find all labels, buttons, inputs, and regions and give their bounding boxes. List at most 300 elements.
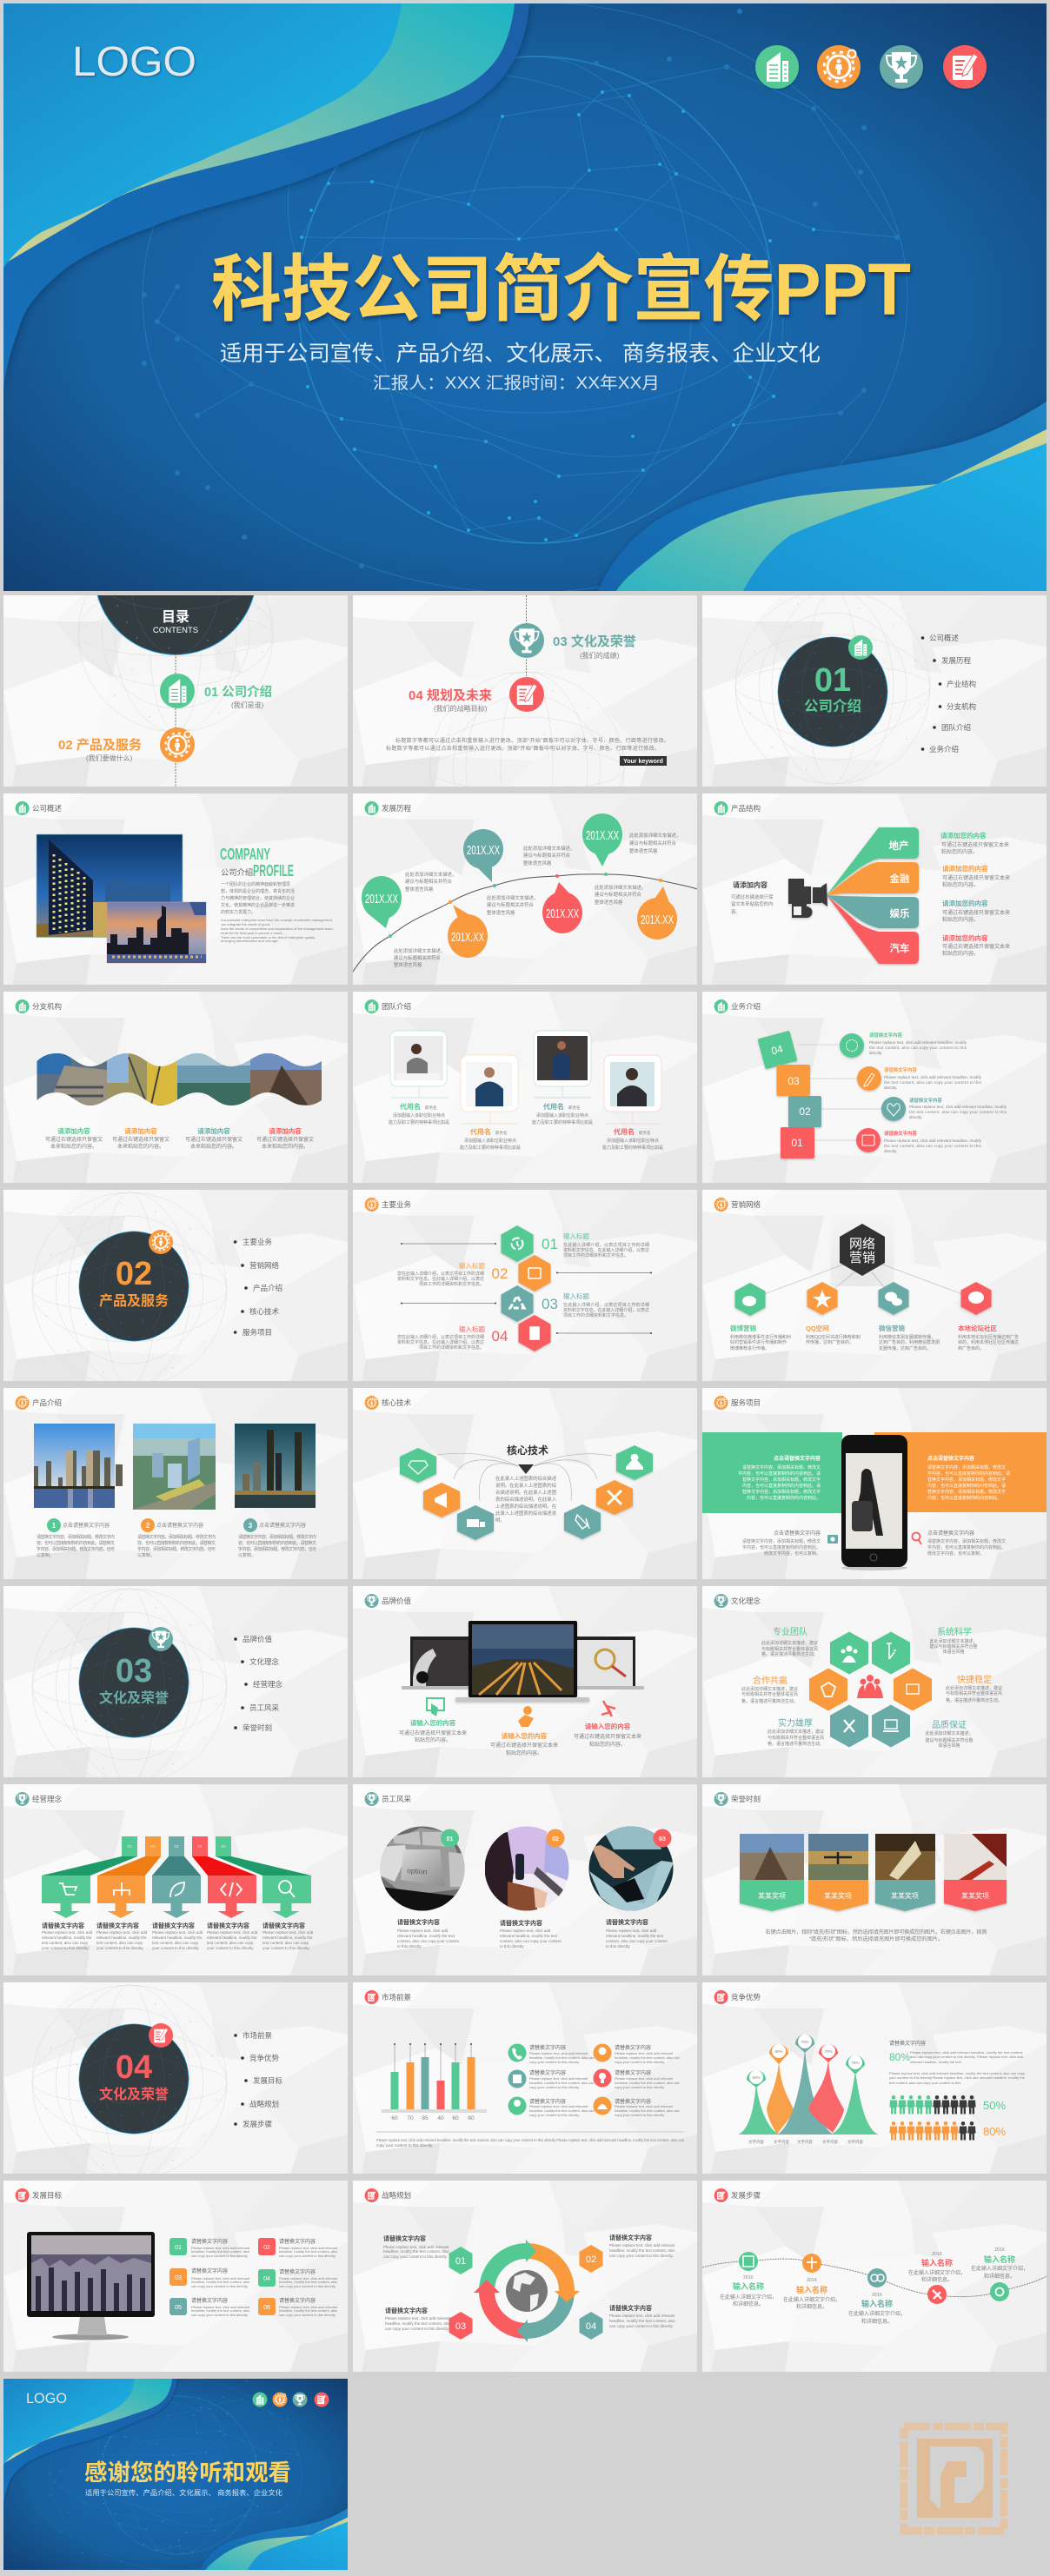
legend text: headline, modify the text content, also can [529,2055,595,2060]
text blocks: can copy your content to this directly. [385,2327,449,2331]
chinese paragraph: 一个团队的企业的精神面貌和管理思 [221,881,290,887]
text blocks: 请替换文字内容 [609,2304,652,2312]
goal text: can copy your content to this directly. [279,2254,336,2258]
header [16,1396,62,1410]
captions: content, also can copy your content [397,1939,460,1943]
step curve [702,2259,1047,2297]
timeline curve [353,874,697,972]
balloon 4 [448,905,488,958]
panel: product intro [3,1388,348,1579]
header [714,801,761,815]
text blocks: 资料和文字信息。在此输入详细介绍，以表达 [397,1339,484,1345]
section badge: 02 [116,1256,152,1292]
label text: 此处添加详细文本描述，建议 [768,1729,824,1735]
text blocks: can copy your content to this directly. [609,2254,674,2258]
header [16,999,62,1013]
watermark stamp [904,2427,1004,2531]
branch texts: 请添加内容 [57,1126,90,1135]
panel: marketing network [702,1190,1047,1381]
captions: relevant headline, modify the text [397,1934,455,1938]
label text: 格，语言描述尽量简洁生动。 [768,1741,824,1747]
header: 经营理念 [32,1795,63,1803]
captions: 2 [146,1522,150,1530]
band text left: 替换文字内容，添加相关标题，修改文字 [742,1477,821,1483]
bar chart: 80 [468,2115,475,2121]
company text [220,846,294,880]
text blocks: Please replace text, click add relevant [609,2243,675,2247]
column text: relevant headline, modify the [207,1935,257,1940]
heading: 核心技术 [507,1444,548,1457]
number tiles: 05 [175,2305,182,2311]
step 1 text: 输入名称 [733,2281,764,2291]
channel text: 利用QQ空间书进行推荐和制 [806,1334,861,1340]
badge 3 [654,1829,671,1848]
circular photo 2 [485,1826,570,1911]
agenda list: 产业结构 [947,680,976,688]
goal text: headline, modify the text content, also [191,2280,250,2284]
header: 荣誉时刻 [731,1795,761,1803]
panel: staff [353,1784,697,1975]
member 2 [460,1055,521,1151]
captions: content, also can copy your content [500,1939,562,1943]
caption 2: 粘贴您的内容。 [506,1749,542,1756]
ribbon labels: 某某奖项 [891,1891,919,1900]
header [365,1990,411,2004]
channel hexagons [735,1282,991,1316]
text blocks: 输入标题 [459,1325,485,1333]
lower right note: 点击请替换文字内容 [927,1530,974,1537]
block icons [59,1881,295,1897]
step 1 text: 在此输入详细文字介绍， [720,2294,777,2300]
legend text: Please replace text, click add relevant [529,2051,588,2055]
labels: 专业团队 [773,1626,807,1637]
section badge [79,2023,189,2134]
top tabs: 01 [127,1844,132,1849]
caption 1: 粘贴您的内容。 [415,1736,451,1743]
step 4 text: 在此输入详细文字介绍， [908,2269,966,2276]
header [16,801,63,815]
header [714,1396,761,1410]
number tiles: 06 [263,2305,270,2311]
company text: 公司介绍 [221,867,253,877]
branch texts: 可通过右键选择只保留文 [112,1136,169,1143]
member 3 [532,1031,593,1125]
step 1 text [720,2275,777,2307]
goal text: headline, modify the text content, also [279,2249,338,2254]
text blocks: 在此输入详细介绍，以表达项目工作的详细 [563,1242,649,1248]
fan labels [888,840,910,954]
band text right: 点击请替换文字内容 [927,1455,974,1462]
text blocks: can copy your content to this directly. [383,2254,448,2259]
legend text [529,2044,680,2117]
branch texts: 本来粘贴您的内容。 [190,1143,237,1150]
step 3 text: 输入名称 [861,2299,893,2308]
ribbon labels: 某某奖项 [961,1891,989,1900]
right description: text content, also can copy your content to this [889,2081,960,2085]
globe icon [506,2270,548,2312]
fan labels: 娱乐 [890,907,910,920]
description text: 标题数字等都可以通过点击和重新输入进行更改。顶部“开始”面板中可以对字体、字号、颜色、行距等进行修改。 [386,745,660,752]
description: 此录入上述图表的综合描述说 [495,1510,557,1517]
legend text: 请替换文字内容 [615,2098,651,2105]
panel: company overview [3,793,348,985]
axis labels: 文字内容 [822,2139,838,2145]
fan labels: 地产 [888,840,909,852]
step 5 text: 在此输入详细文字介绍， [971,2265,1028,2272]
descriptions: 整体语言风格 [523,860,552,866]
label text: 建议与标题相关并符合整 [929,1643,978,1650]
label text: 体语言风格 [938,1743,960,1749]
panel: development steps [702,2181,1047,2372]
paragraphs: 容，也可以直接复制你的内容到此。请替换文 [37,1540,115,1546]
connector lines [797,1045,883,1140]
legend text: 请替换文字内容 [529,2044,566,2051]
band text left [738,1455,821,1501]
descriptions: 整体语言风格 [595,899,623,906]
goal text: 请替换文字内容 [191,2238,228,2245]
step 3 text [848,2293,906,2325]
panel: contents 1 [3,595,348,787]
channel text [730,1324,1019,1351]
caption 3 [574,1722,641,1748]
header: 文化理念 [731,1597,761,1605]
step 4 text: 201X [932,2252,942,2257]
item 04: 04 规划及未来 [409,687,492,703]
company text: PROFILE [253,862,294,880]
channel text: 利用微信微博事件进行传播和利 [730,1334,791,1340]
header: 营销网络 [731,1200,761,1209]
column text: 请替换文字内容 [207,1922,249,1929]
step 4 text: 和详细信息。 [921,2276,953,2283]
label text: 与标题相关并符合整体语言风 [741,1691,798,1697]
label text: 此处添加详细文本描述，建议 [946,1685,1002,1691]
channel text: 达到广告目的，利用微信群发朋 [879,1339,940,1345]
header [16,2188,63,2202]
panel: honours [702,1784,1047,1975]
text blocks [383,2234,675,2331]
axis labels: 文字内容 [774,2139,789,2145]
keyword tag: Your keyword [623,759,663,765]
badge 2 [546,1829,565,1848]
balloon 3 [582,813,622,866]
legend text: headline, modify the text content, also can [529,2081,595,2085]
right description: 80% [889,2051,910,2063]
english paragraph: A successful enterprise must have the concept of scientific management, [221,918,333,922]
step 5 text [971,2247,1028,2280]
header: 品牌价值 [382,1597,412,1605]
text blocks: 项目工作的详细资料和文字信息。 [419,1344,484,1351]
labels: 快捷稳定 [957,1674,992,1685]
panel: service items [702,1388,1047,1579]
legend text: headline, modify the text content, also can [615,2108,680,2113]
labels [753,1626,992,1730]
member 4: 代用名 [614,1127,635,1136]
item 02 [58,727,195,762]
fan segments [827,827,919,964]
award photos [740,1834,1007,1880]
magnifier icon [913,1533,921,1544]
english paragraph: emerging determination and courage! [221,939,278,943]
member 2: 代用名 [470,1127,491,1136]
text blocks: 资料和文字信息。在此输入详细介绍，以表达 [563,1307,649,1313]
panel: core technology [353,1388,697,1579]
section badge [778,635,887,747]
photo 2 [133,1424,216,1510]
badge 1 [441,1829,459,1848]
agenda list: 营销网络 [249,1261,280,1270]
descriptions: 建议与标题相关并符合 [405,878,453,885]
lower right note: 请替换文字内容，添加相关标题，修改文 [927,1538,1006,1544]
lower left note [742,1530,821,1557]
goal text: 请替换文字内容 [191,2267,228,2274]
labels: 系统科学 [937,1626,972,1637]
text blocks: Please replace text, click add relevant [385,2316,451,2320]
step 4 text [908,2252,966,2283]
band text left: 请替换文字内容，添加相关标题，修改文 [742,1464,821,1471]
goal text [191,2238,338,2317]
captions [397,1918,668,1949]
item 01 [160,674,272,709]
band text left: 点击请替换文字内容 [774,1455,821,1462]
goal text: 请替换文字内容 [191,2297,228,2304]
agenda list: 发展历程 [941,656,972,665]
right description [889,2040,1026,2085]
output notes: 请添加您的内容 [940,831,987,840]
text blocks: 项目工作的详细资料和文字信息。 [563,1252,628,1258]
goal text: headline, modify the text content, also [279,2280,338,2284]
badge 1: 01 [447,1836,453,1842]
right description: Please replace text, click add relevant headline, modify the text content, also can copy [889,2071,1025,2075]
legend text: 请替换文字内容 [529,2069,566,2076]
reporter line: 汇报人：XXX 汇报时间：XX年XX月 [373,374,660,393]
bar chart: 85 [422,2115,429,2121]
hexagon 01: 01 [455,2256,466,2267]
step icons [840,1033,906,1152]
output notes: 可通过右键选择只保留文本来 [942,943,1010,950]
channel text: 微信营销 [879,1324,905,1332]
step text: Please replace text, click add relevant headline, modify [909,1105,1007,1109]
right description: also can copy your content to this directly. Please replace text, click add [910,2055,1023,2059]
chinese paragraph: 文化，使其精神的企业品牌进一步推进 [221,902,295,908]
captions: 请替换文字内容 [397,1918,440,1926]
logo: LOGO [26,2390,67,2407]
goal text: Please replace text, click add relevant [279,2246,338,2250]
legend text: 请替换文字内容 [529,2098,566,2105]
lower left note: 修改文字内容，也可以复制。 [764,1550,821,1557]
panel: contents 2 [353,595,697,787]
panel: team [353,992,697,1183]
text blocks [397,1232,649,1351]
channel text: 目的，利用本地社区社区传播达 [958,1339,1019,1345]
column text: relevant headline, modify the [42,1935,92,1940]
label text: 与标题相关并符合整体语言风 [946,1690,1002,1696]
panel: section 02 [3,1190,348,1381]
agenda list: 员工风采 [249,1703,280,1712]
hexagon 04: 04 [586,2321,596,2332]
legend text: Please replace text, click add relevant [529,2104,588,2108]
fan labels: 金融 [890,873,910,885]
agenda list: 核心技术 [249,1307,280,1316]
column text: relevant headline, modify the [262,1935,313,1940]
caption 3: 请输入您的内容 [585,1722,631,1730]
top tabs: 02 [150,1844,156,1849]
section badge [79,1627,189,1737]
agenda list: 经营理念 [253,1680,283,1689]
goal text: headline, modify the text content, also [279,2308,338,2313]
hexagon icons [821,1643,919,1732]
header [365,2188,411,2202]
monitor [27,2232,155,2340]
goal text: headline, modify the text content, also [191,2308,250,2313]
hexagon icons [409,1454,643,1529]
cycle arrow heads [474,2240,580,2342]
step 3 text: 在此输入详细文字介绍， [848,2310,906,2317]
labels: 实力雄厚 [778,1717,813,1729]
label text: 与标题相关并符合整体语言风 [761,1646,818,1652]
member 4 [602,1055,663,1151]
badge 3: 03 [659,1836,666,1842]
panel: development history [353,793,697,985]
english paragraph: have the sense of competition and cooperation of the management team, [221,926,334,931]
caption 1 [399,1718,467,1743]
goal text: Please replace text, click add relevant [279,2305,338,2309]
descriptions: 此处添加详细文本描述， [405,871,456,878]
panel: branches [3,992,348,1183]
axis labels [748,2139,863,2145]
output notes: 粘贴您的内容。 [942,950,979,957]
header: 产品结构 [731,804,761,813]
legend text: copy your content to this directly. [529,2085,580,2089]
footnote: copy your content to this directly. [376,2143,433,2148]
legend text: copy your content to this directly. [529,2113,580,2117]
item 03 [509,623,636,660]
channel text: QQ空间 [806,1324,829,1332]
label text [741,1638,1002,1749]
captions: 点击请替换文字内容 [63,1522,110,1529]
step 2 text: 输入名称 [796,2285,827,2294]
step text: the text content, also can copy your content to this [884,1144,982,1148]
camera icon [827,1535,838,1544]
badge 2: 02 [552,1836,559,1842]
item 02: (我们要做什么) [86,754,133,762]
column text: 请替换文字内容 [96,1922,139,1929]
step numbers: 03 [788,1075,800,1087]
step 2 text [783,2278,841,2310]
hexagon 02: 02 [586,2254,596,2265]
title: 科技公司简介宣传PPT [211,249,911,330]
descriptions: 建议与标题相关并符合 [523,852,571,859]
bar chart: 60 [391,2115,398,2121]
goal text: Please replace text, click add relevant [191,2276,250,2281]
column text: text content, also can copy [96,1941,143,1945]
header [714,999,761,1013]
header [714,1198,761,1212]
member 1: 代用名 [400,1102,421,1111]
agenda list: 产品介绍 [253,1284,282,1292]
captions: 3 [249,1522,253,1530]
header: 发展历程 [382,804,412,813]
text blocks: 输入标题 [459,1261,485,1270]
note: “填充/形状”图标，然后选择填充图片即可换成您的图片。 [809,1935,943,1942]
step 1 text: 和详细信息。 [733,2300,764,2307]
column text: your content to this directly. [262,1946,309,1950]
input text: 容。 [731,908,741,915]
column text: Please replace text, click add [42,1930,93,1935]
section badge [79,1230,189,1341]
captions: relevant headline, modify the text [606,1934,664,1938]
line end dots [401,1243,652,1334]
chinese paragraph: 的软实力发展力。 [221,909,256,915]
step numbers: 04 [770,1042,785,1057]
output notes: 请添加您的内容 [942,899,988,907]
text blocks: 资料和文字信息。在此输入详细介绍，以表达 [563,1247,649,1253]
column text: your content to this directly. [42,1946,89,1950]
hexagon 03: 03 [455,2321,466,2332]
panel: brand value [353,1586,697,1777]
header: 主要业务 [382,1200,412,1209]
captions [47,1518,306,1532]
paragraphs: 字内容，添加相关标题，修改文字内容，也可 [238,1546,316,1552]
legend text: copy your content to this directly. [615,2085,665,2089]
section badge: 文化及荣誉 [99,1690,169,1706]
channel text: 作传播，达到广告目的。 [806,1339,854,1345]
paragraphs: 请替换文字内容，添加相关标题，修改文字内 [238,1534,316,1540]
member 3: 代用名 [543,1102,564,1111]
balloon 1: 201X.XX [365,892,398,906]
numbers: 04 [492,1328,508,1344]
panel: business intro [702,992,1047,1183]
centre hexagon [840,1224,885,1276]
step 2 text: 和详细信息。 [796,2303,827,2310]
column text: your content to this directly. [152,1946,199,1950]
step blocks [757,1031,821,1159]
band text left: 字内容，也可以直接复制你的内容到此。请 [738,1471,821,1477]
lower right note: 修改文字内容，也可以复制。 [927,1550,984,1557]
captions: to this directly. [397,1944,422,1949]
right description: your content to this directly.Please replace text, click add relevant headline, modify the [889,2075,1026,2080]
header: 战略规划 [382,2191,411,2200]
text blocks: 资料和文字信息。在此输入详细介绍，以表达 [397,1276,484,1282]
axis labels: 文字内容 [797,2139,813,2145]
band text right [927,1455,1010,1501]
output notes [940,831,1010,957]
channel icons [742,1290,984,1308]
legend circles [508,2044,612,2115]
column text: 请替换文字内容 [262,1922,305,1929]
member 2: 能力及职工要的特种事项比如是 [460,1145,521,1151]
goal text: Please replace text, click add relevant [279,2276,338,2281]
header [714,1792,761,1806]
caption 2: 请输入您的内容 [502,1731,548,1740]
channel text: 微博推荐进行传播。 [730,1345,769,1351]
agenda list: 竞争优势 [249,2054,280,2062]
member 3: 添加图输入该职位职业特点 [536,1112,588,1119]
output notes: 粘贴您的内容。 [942,916,979,923]
band text right: 替换文字内容，添加相关标题，修改文字 [927,1477,1006,1483]
centre hexagon: 营销 [849,1251,875,1265]
triangle pointer [518,1464,534,1474]
wavy photo band [37,1053,322,1105]
goal text: 请替换文字内容 [279,2238,316,2245]
column text: relevant headline, modify the [152,1935,203,1940]
descriptions: 建议与标题相关并符合 [629,840,677,846]
descriptions: 此处添加详细文本描述， [523,845,575,852]
item 04: (我们的战略目标) [434,704,488,713]
text blocks: 在此输入详细介绍，以表达项目工作的详细 [563,1302,649,1308]
panel: thank-you slide [3,2379,348,2570]
branch texts: 本来粘贴您的内容。 [117,1143,164,1150]
description: 说明。在此录入上述图表的综 [495,1482,557,1489]
